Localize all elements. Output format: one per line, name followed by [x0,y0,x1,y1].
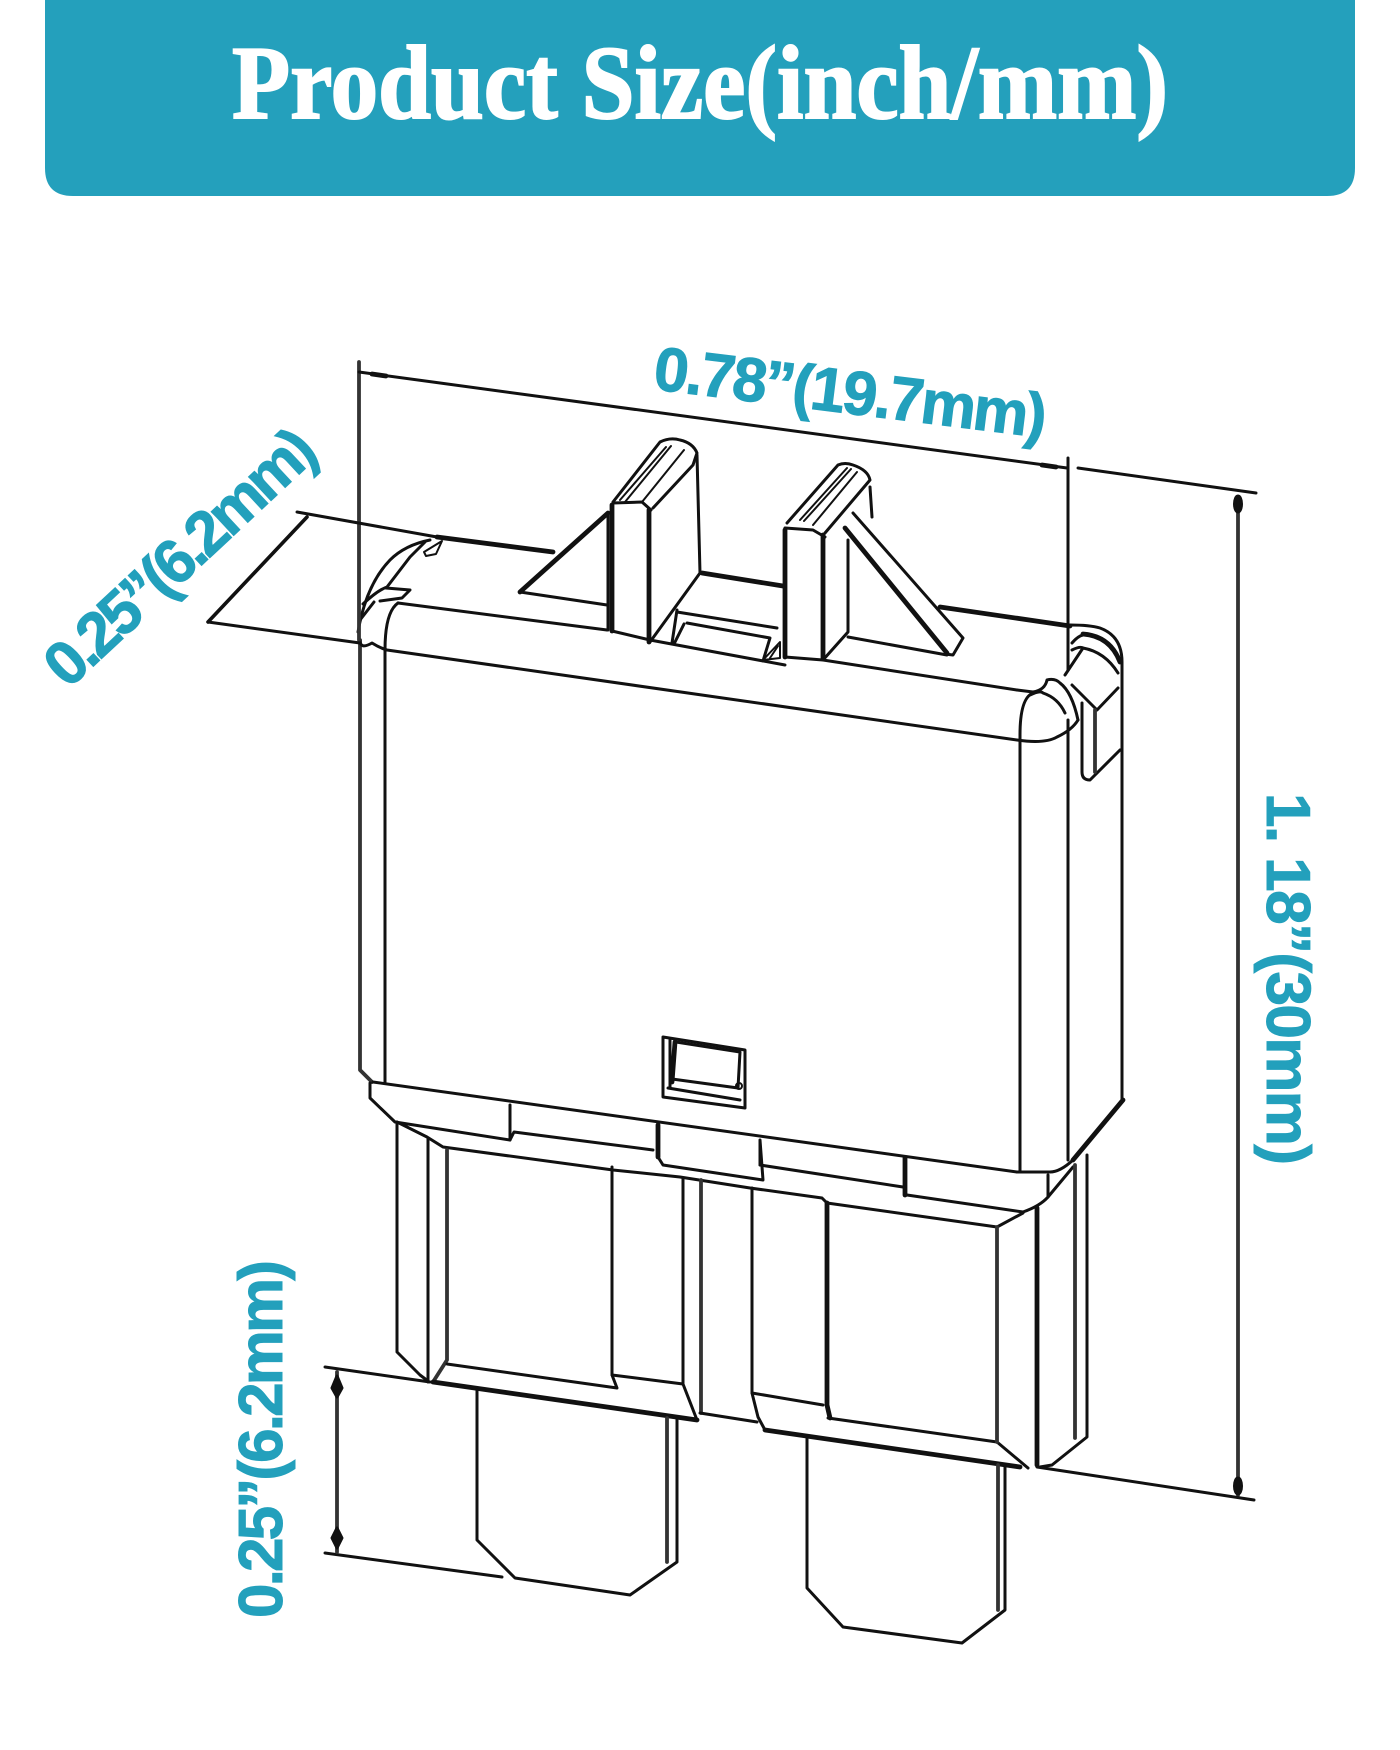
label: pin length: 0.25”(6.2mm) [227,1260,296,1618]
dimension: height [1037,468,1322,1500]
blade housing right [700,1155,1087,1468]
label: width: 0.78”(19.7mm) [650,334,1051,452]
left prong [477,1390,677,1595]
title: Product Size(inch/mm) [232,24,1168,141]
right prong [807,1437,1005,1643]
back left corner [358,540,442,632]
label: height: 1. 18”(30mm) [1253,793,1322,1165]
header banner [45,0,1355,196]
dimension: depth [30,414,437,700]
fuse drawing [358,439,1123,1643]
right clip [785,464,963,660]
right corner tab [1017,634,1120,780]
front window [663,1037,745,1108]
dimension: width [359,334,1067,640]
dimension: pin length [227,1260,502,1618]
body outline [360,458,1123,1172]
left clip [520,439,700,642]
label: depth: 0.25”(6.2mm) [30,414,330,700]
center slot [672,610,780,661]
lower body rim [370,1082,1073,1227]
blade housing left [397,1124,697,1420]
